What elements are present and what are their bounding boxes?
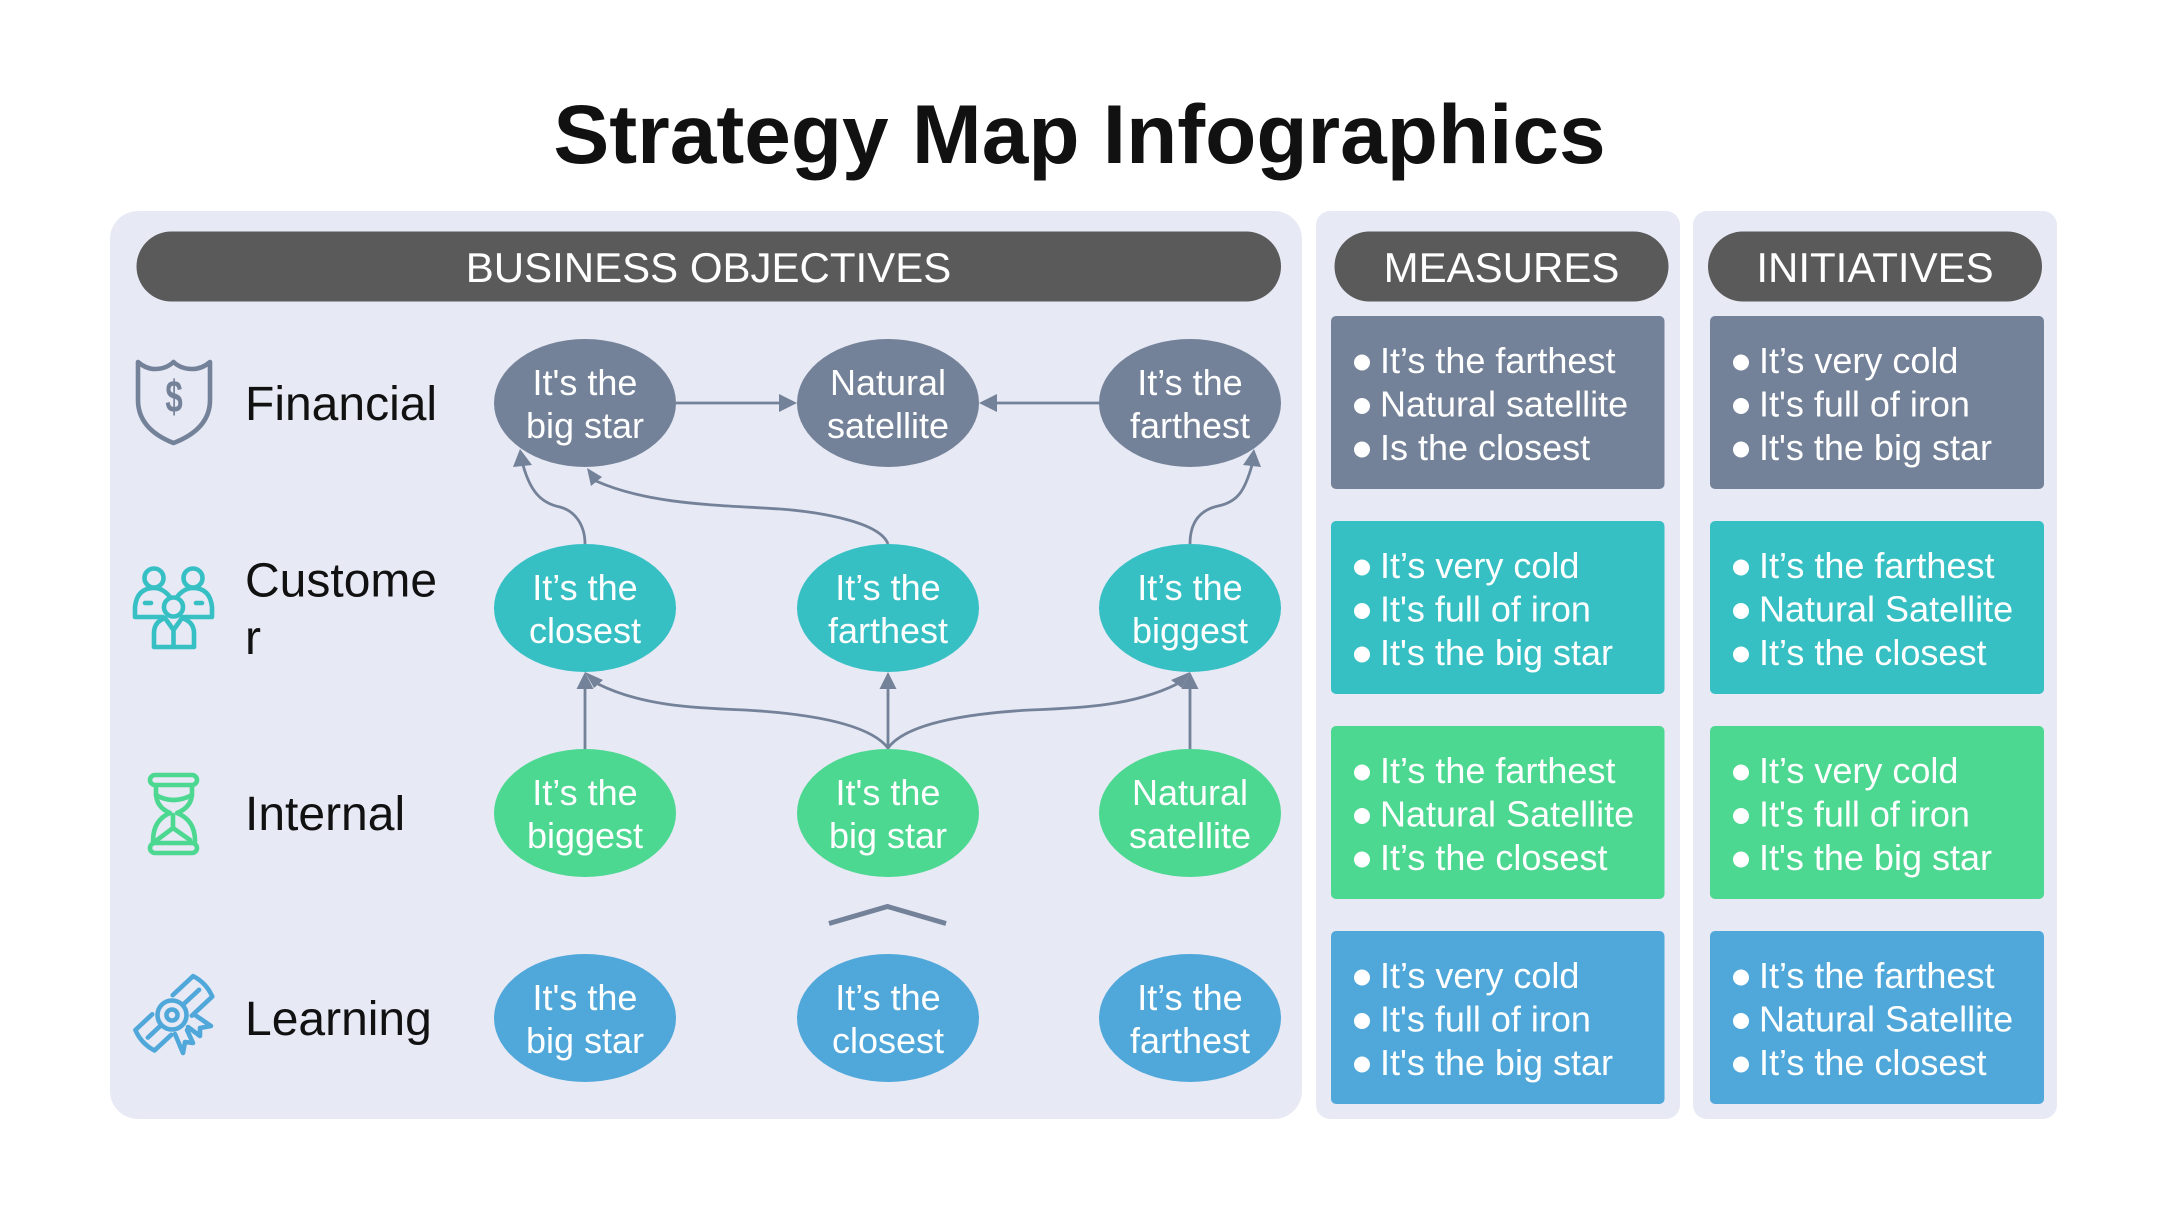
list: initiatives customer: It’s the closest	[1759, 632, 1986, 673]
arrow: internal left up	[576, 672, 594, 749]
list: measures customer: It’s very cold	[1380, 545, 1579, 586]
row label: internal: Internal	[245, 788, 405, 841]
bubble: financial 2: Natural	[830, 362, 946, 403]
list: initiatives financial: It's full of iron	[1759, 384, 1970, 424]
list: measures customer: It's the big star	[1380, 632, 1613, 673]
bubble: customer 1	[494, 544, 676, 672]
list: measures internal	[1331, 726, 1664, 899]
bubble: financial 1: big star	[526, 405, 644, 446]
list: initiatives internal: It’s very cold	[1759, 750, 1958, 791]
list: measures financial: It’s the farthest	[1380, 340, 1615, 381]
bubble: internal 1: biggest	[527, 815, 643, 856]
heading: initiatives: INITIATIVES	[1756, 244, 1994, 291]
list: measures internal: It’s the closest	[1380, 837, 1607, 878]
bubble: financial 1	[494, 339, 676, 467]
list: initiatives internal: It's full of iron	[1759, 794, 1970, 834]
bubble: learning 1: big star	[526, 1020, 644, 1061]
bubble: internal 2	[797, 749, 979, 877]
heading: business objectives	[136, 232, 1281, 302]
bubble: learning 1: It's the	[533, 977, 637, 1018]
bubble: internal 1	[494, 749, 676, 877]
bubble: customer 2	[797, 544, 979, 672]
panel: measures	[1316, 211, 1680, 1119]
bubble: learning 3	[1099, 954, 1281, 1082]
list: measures customer: It's full of iron	[1380, 588, 1591, 630]
list: measures learning	[1331, 931, 1664, 1104]
heading: initiatives	[1708, 232, 2042, 302]
bubble: internal 2: big star	[829, 815, 947, 856]
bubble: learning 2: closest	[832, 1020, 944, 1061]
bubble: financial 1: It's the	[533, 362, 637, 403]
panel: business objectives	[110, 211, 1302, 1119]
list: initiatives learning: Natural Satellite	[1759, 998, 2013, 1040]
bubble: customer 1: closest	[529, 610, 641, 651]
list: measures financial	[1331, 316, 1664, 489]
bubble: customer 3	[1099, 544, 1281, 672]
icon: customers	[135, 568, 212, 647]
arrow: internal centre to customer biggest	[888, 672, 1190, 748]
row label: customer: r	[245, 612, 261, 665]
icon: diploma	[134, 974, 214, 1053]
bubble: financial 2: satellite	[827, 405, 949, 446]
list: measures financial: Natural satellite	[1380, 384, 1628, 424]
icon: shield with dollar: $	[165, 372, 183, 423]
list: initiatives customer: It’s the farthest	[1759, 545, 1994, 586]
row label: financial: Financial	[245, 378, 437, 431]
bubble: internal 3: satellite	[1129, 815, 1251, 856]
bubble: financial 3: farthest	[1130, 405, 1250, 446]
heading: measures: MEASURES	[1384, 244, 1619, 291]
arrow: customer farthest to big star	[587, 468, 888, 544]
bubble: internal 3	[1099, 749, 1281, 877]
list: initiatives internal	[1710, 726, 2044, 899]
row label: customer: Custome	[245, 554, 437, 608]
arrow: internal centre up	[880, 672, 896, 749]
list: initiatives financial	[1710, 316, 2044, 489]
icon: hourglass	[150, 775, 197, 853]
bubble: learning 2: It’s the	[835, 977, 941, 1018]
bubble: customer 1: It’s the	[532, 567, 638, 608]
list: measures learning: It’s very cold	[1380, 955, 1579, 996]
bubble: financial 3	[1099, 339, 1281, 467]
list: initiatives learning: It’s the farthest	[1759, 955, 1994, 996]
list: initiatives financial: It's the big star	[1759, 427, 1992, 468]
bubble: internal 1: It’s the	[532, 772, 638, 813]
heading: measures	[1334, 232, 1668, 302]
arrow: internal right up	[1182, 672, 1198, 749]
arrow: financial right to centre	[676, 394, 797, 412]
list: initiatives learning	[1710, 931, 2044, 1104]
arrow: customer closest to big star	[513, 449, 585, 544]
row label: learning: Learning	[245, 993, 432, 1046]
bubble: learning 2	[797, 954, 979, 1082]
bubble: learning 3: It’s the	[1137, 977, 1243, 1018]
arrow: customer biggest to farthest	[1190, 449, 1261, 544]
list: initiatives financial: It’s very cold	[1759, 340, 1958, 381]
bubble: customer 3: biggest	[1132, 610, 1248, 651]
list: initiatives internal: It's the big star	[1759, 837, 1992, 878]
bubble: customer 2: It’s the	[835, 567, 941, 608]
bubble: internal 2: It's the	[836, 772, 940, 813]
list: measures customer	[1331, 521, 1664, 694]
bubble: internal 3: Natural	[1132, 772, 1248, 813]
heading: business objectives: BUSINESS OBJECTIVES	[466, 244, 951, 291]
title: Strategy Map Infographics	[553, 87, 1606, 181]
list: initiatives customer	[1710, 521, 2044, 694]
bubble: financial 3: It’s the	[1137, 362, 1243, 403]
bubble: customer 2: farthest	[828, 610, 948, 651]
row label: customer	[245, 554, 437, 665]
list: measures learning: It's the big star	[1380, 1042, 1613, 1083]
icon: shield with dollar	[138, 362, 210, 443]
bubble: learning 3: farthest	[1130, 1020, 1250, 1061]
list: measures internal: Natural Satellite	[1380, 794, 1634, 834]
list: measures internal: It’s the farthest	[1380, 750, 1615, 791]
bubble: learning 1	[494, 954, 676, 1082]
list: measures learning: It's full of iron	[1380, 998, 1591, 1040]
list: measures financial: Is the closest	[1380, 427, 1590, 468]
panel: initiatives	[1693, 211, 2057, 1119]
bubble: financial 2	[797, 339, 979, 467]
arrow: chevron between learning and internal	[829, 906, 946, 924]
bubble: customer 3: It’s the	[1137, 567, 1243, 608]
arrow: internal centre to customer closest	[585, 672, 888, 748]
list: initiatives customer: Natural Satellite	[1759, 588, 2013, 630]
arrow: financial left to centre	[979, 394, 1100, 412]
list: initiatives learning: It’s the closest	[1759, 1042, 1986, 1083]
